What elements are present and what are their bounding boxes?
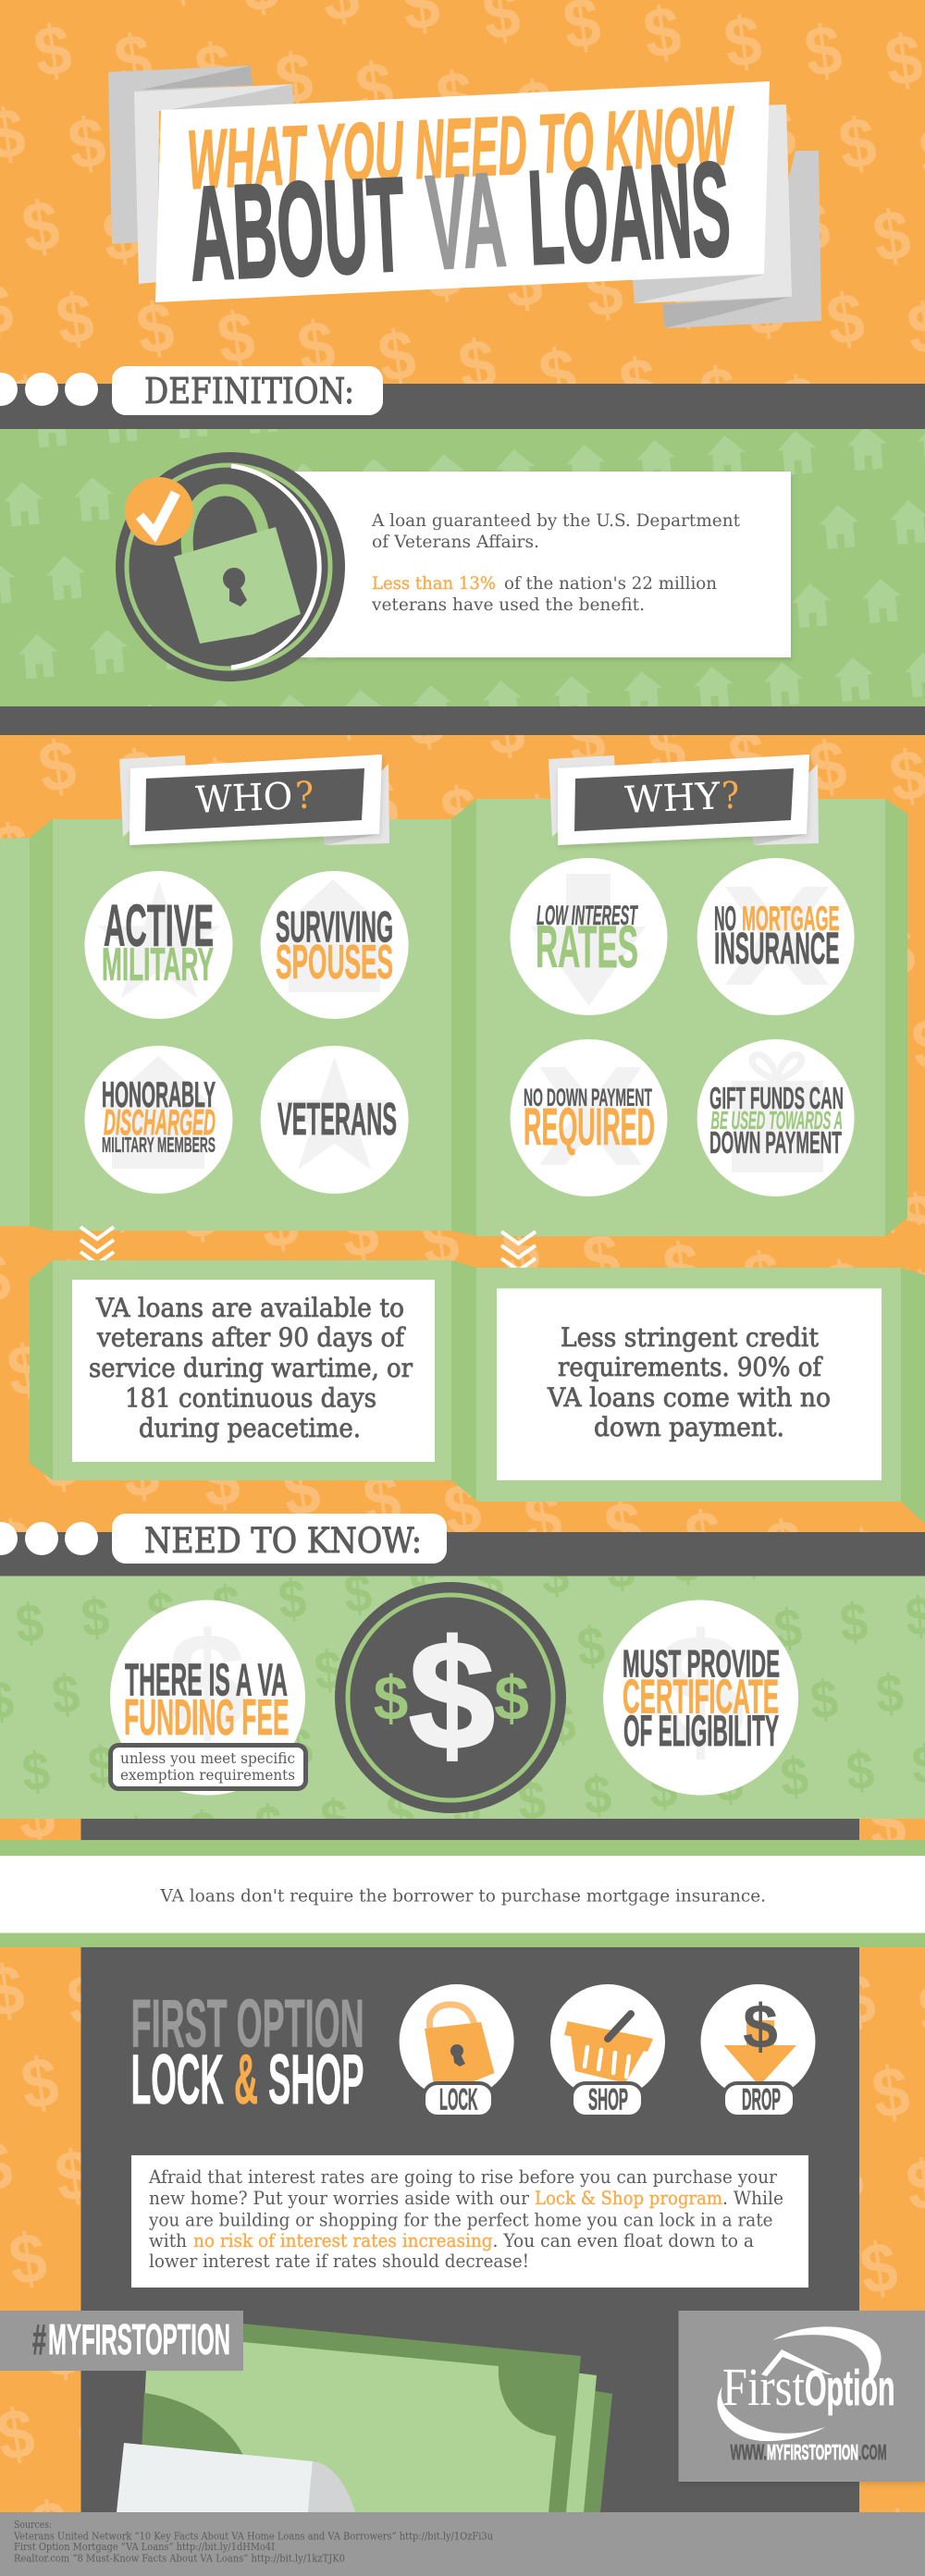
icon: padlock badge <box>116 452 345 681</box>
panel heading: why: WHY <box>623 776 722 822</box>
background: orange dollar pattern header <box>0 0 925 385</box>
circle: funding fee: $ <box>168 1604 246 1761</box>
lock and shop heading: LOCK <box>131 2041 224 2119</box>
lock and shop heading: & <box>234 2041 258 2119</box>
circle: no mortgage insurance <box>697 858 855 1015</box>
orange pattern middle section <box>0 735 925 1535</box>
icon: lock <box>400 1984 514 2116</box>
icon: orange check badge <box>125 477 193 546</box>
icon: dollar badge <box>335 1582 566 1813</box>
circle: no down payment required <box>511 1039 668 1196</box>
hashtag tab: MYFIRSTOPTION <box>48 2315 230 2363</box>
dark divider band <box>0 706 925 735</box>
panel: why <box>476 754 907 1236</box>
circle: honorably discharged <box>85 1046 233 1194</box>
circle: active military <box>85 871 233 1019</box>
why fact text: VA loans come with no <box>547 1382 831 1413</box>
arrow: why chevrons <box>501 1232 536 1270</box>
circle: funding fee: FUNDING FEE <box>124 1688 289 1746</box>
lock and shop text box: Lock & Shop program <box>535 2188 722 2209</box>
illustration: money and paper <box>117 2324 612 2512</box>
circle: honorably discharged: DISCHARGED <box>104 1103 216 1143</box>
circle: low interest rates: RATES <box>536 914 638 980</box>
icon: rate drop: $ <box>743 1992 778 2062</box>
green need to know section <box>0 1576 925 1820</box>
circle: active military: MILITARY <box>102 938 214 990</box>
lock and shop text box: . While <box>722 2188 783 2209</box>
lock and shop text box: lower interest rate if rates should decrease! <box>149 2251 529 2272</box>
circle: honorably discharged: HONORABLY <box>102 1075 216 1115</box>
lock and shop text box: no risk of interest rates increasing <box>193 2230 492 2251</box>
circle: certificate of eligibility: MUST PROVIDE <box>623 1642 780 1685</box>
why fact text: requirements. 90% of <box>558 1352 823 1382</box>
who fact text: service during wartime, or <box>89 1353 413 1383</box>
sources footer <box>0 2512 925 2576</box>
circle: surviving spouses: SURVIVING <box>276 902 393 951</box>
panel: why fact <box>476 1268 925 1524</box>
circle: no mortgage insurance: NO <box>714 900 736 938</box>
callout: exemption note: exemption requirements <box>120 1766 295 1784</box>
circle: surviving spouses <box>261 871 409 1019</box>
lock and shop text box <box>131 2155 808 2288</box>
who fact text: veterans after 90 days of <box>96 1322 406 1353</box>
logo panel: .COM <box>858 2440 886 2464</box>
panel: lock and shop <box>81 1947 859 2512</box>
circle: veterans: VETERANS <box>278 1095 397 1145</box>
icon: rate drop <box>701 1984 816 2116</box>
icon: lock: LOCK <box>439 2082 477 2116</box>
lock and shop heading <box>131 1987 364 2119</box>
definition text box: veterans have used the benefit. <box>371 595 645 615</box>
icon: rate drop: DROP <box>742 2082 781 2116</box>
circle: gift funds <box>697 1039 855 1196</box>
definition heading band <box>0 366 925 429</box>
definition text box: A loan guaranteed by the U.S. Department <box>371 511 741 531</box>
hashtag tab: # <box>32 2315 46 2363</box>
panel: lock and shop: FIRST OPTION <box>131 1987 364 2062</box>
icon: shopping basket: SHOP <box>588 2082 628 2116</box>
callout: exemption note: unless you meet specific <box>120 1749 295 1767</box>
why fact text: Less stringent credit <box>561 1322 820 1353</box>
circle: surviving spouses: SPOUSES <box>276 936 393 989</box>
panel heading: why: ? <box>721 775 740 817</box>
panel heading: who: WHO <box>194 775 293 822</box>
icon: dollar badge: $ <box>374 1663 408 1734</box>
arrow: who chevrons <box>80 1227 114 1264</box>
icon: shopping basket <box>550 1984 665 2116</box>
panel heading: who <box>119 754 389 845</box>
lock and shop text box: you are building or shopping for the perfect home you can lock in a rate <box>148 2210 772 2230</box>
hashtag tab <box>0 2311 243 2371</box>
circle: no down payment required: NO DOWN PAYMENT <box>524 1084 652 1111</box>
lock and shop text box: new home? Put your worries aside with our <box>149 2188 530 2209</box>
orange side strips with dollar pattern <box>0 1819 925 2512</box>
title line 2: VA <box>424 144 509 298</box>
need to know heading band: NEED TO KNOW: <box>144 1521 422 1561</box>
who fact text: 181 continuous days <box>125 1383 376 1413</box>
need to know heading band <box>0 1514 925 1576</box>
lock and shop text box: . You can even float down to a <box>492 2230 754 2251</box>
title line 2: ABOUT <box>186 149 408 309</box>
icon: dollar badge: $ <box>494 1663 529 1734</box>
lock and shop text box: with <box>149 2230 187 2251</box>
panel: who <box>0 754 476 1236</box>
sources footer: Sources: <box>14 2519 52 2531</box>
definition text box: of the nation's 22 million <box>504 574 717 594</box>
logo panel: First <box>722 2357 805 2417</box>
who fact text: during peacetime. <box>139 1413 361 1443</box>
sources footer: Realtor.com “8 Must-Know Facts About VA Loans” http://bit.ly/1kzTJK0 <box>14 2552 345 2565</box>
panel heading: why <box>549 754 819 845</box>
circle: honorably discharged: MILITARY MEMBERS <box>102 1133 216 1157</box>
panel: who fact <box>30 1260 476 1501</box>
why fact text <box>547 1322 831 1442</box>
circle: funding fee: THERE IS A VA <box>125 1655 288 1705</box>
dark connector <box>81 1819 859 1840</box>
who fact text: VA loans are available to <box>95 1293 404 1323</box>
circle: low interest rates <box>511 858 668 1015</box>
mortgage insurance note strip <box>0 1840 925 1947</box>
logo panel: WWW. <box>731 2440 767 2464</box>
sources footer: First Option Mortgage “VA Loans” http://bit.ly/1dHMo4I <box>14 2541 275 2553</box>
icon: dollar badge: $ <box>409 1610 495 1782</box>
circle: active military: ACTIVE <box>104 892 214 959</box>
circle: certificate of eligibility <box>603 1600 798 1796</box>
panel heading: who: ? <box>294 774 314 817</box>
panel: lock and shop: SHOP <box>268 2041 364 2119</box>
title banner <box>108 66 821 328</box>
logo: arc and roof <box>717 2326 881 2441</box>
who fact text <box>89 1293 413 1443</box>
mortgage insurance note strip: VA loans don't require the borrower to purchase mortgage insurance. <box>160 1886 766 1907</box>
sources footer: Veterans United Network “10 Key Facts About VA Home Loans and VA Borrowers” http://bit.ly/1OzFi3u <box>13 2530 493 2543</box>
definition text box <box>278 472 791 657</box>
circle: low interest rates: LOW INTEREST <box>536 901 638 931</box>
lock and shop text box: Afraid that interest rates are going to rise before you can purchase your <box>148 2166 778 2188</box>
definition heading band: DEFINITION: <box>144 371 354 411</box>
green definition section with house pattern <box>0 429 925 707</box>
circle: veterans <box>261 1046 409 1194</box>
definition text box: Less than 13% <box>372 574 496 594</box>
circle: no down payment required: REQUIRED <box>524 1098 655 1157</box>
definition text box: of Veterans Affairs. <box>372 533 539 552</box>
circle: certificate of eligibility: $ <box>655 1601 746 1783</box>
callout: exemption note <box>111 1746 305 1788</box>
why fact text: down payment. <box>594 1412 784 1442</box>
logo panel <box>679 2311 925 2482</box>
circle: funding fee <box>110 1600 305 1796</box>
